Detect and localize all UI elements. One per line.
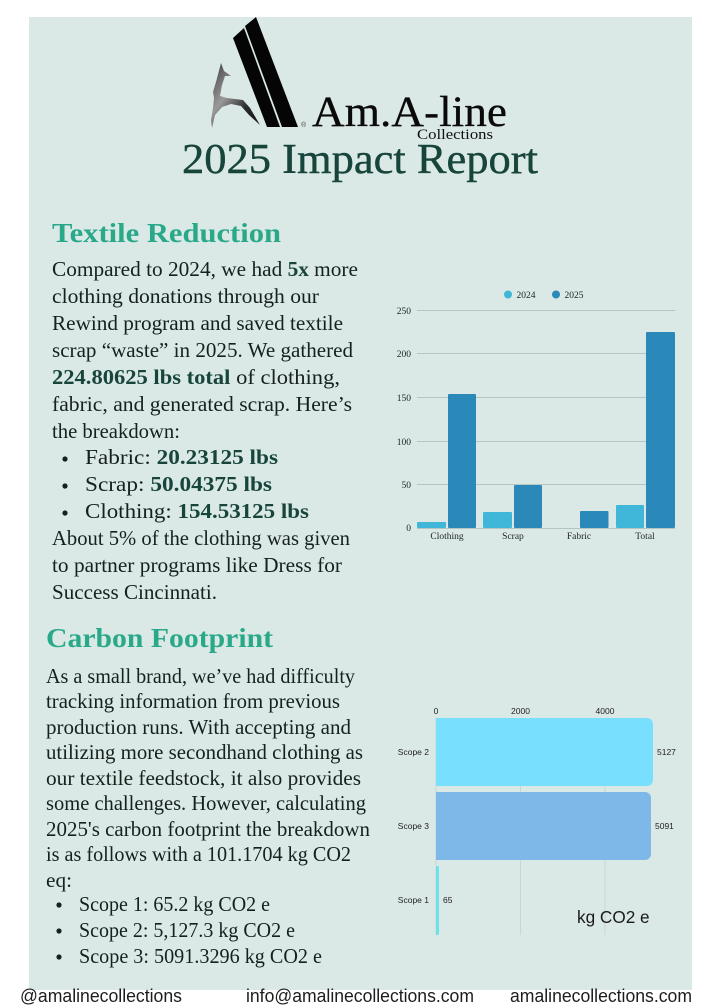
y axis labels: 250 (397, 307, 411, 317)
scope labels: Scope 3 (398, 821, 429, 831)
legend (504, 290, 584, 301)
list: textile breakdown: Fabric: 20.23125 lbs (85, 445, 278, 469)
legend: 2025 (564, 291, 584, 301)
x axis labels: Fabric (567, 532, 591, 542)
list: textile breakdown (62, 445, 309, 523)
text block: partner programs: About 5% of the clothing was given (52, 526, 350, 550)
value labels: 65 (443, 895, 453, 905)
value labels: 5091 (655, 821, 674, 831)
heading: textile reduction: Textile Reduction (52, 218, 281, 248)
bars: 2024 (417, 505, 644, 528)
top axis labels (434, 706, 615, 716)
x axis labels: Total (635, 532, 655, 542)
icon: logo stripes (233, 17, 298, 127)
legend: 2024 (516, 291, 536, 301)
text block: carbon intro (46, 664, 370, 892)
text block: carbon intro: 2025's carbon footprint the breakdown (46, 817, 370, 841)
logo wordmark: Am.A-line (312, 89, 507, 136)
x axis labels: Clothing (430, 532, 464, 542)
text block: textile intro: Rewind program and saved textile (52, 311, 343, 335)
text block: carbon intro: some challenges. However, calculating (46, 791, 366, 815)
top axis labels: 4000 (596, 706, 615, 716)
scope labels (398, 747, 429, 905)
bar chart: textile by year (397, 290, 675, 542)
list: textile breakdown: Scrap: 50.04375 lbs (85, 472, 272, 496)
value labels: 5127 (657, 747, 676, 757)
y axis labels: 0 (406, 524, 411, 534)
icon: registered mark: ® (301, 121, 307, 129)
list: scope breakdown: Scope 3: 5091.3296 kg CO2 e (79, 944, 322, 968)
y axis labels: 50 (402, 481, 411, 491)
title: 2025 Impact Report (182, 137, 538, 183)
top axis labels: 0 (434, 706, 439, 716)
text block: textile intro (52, 257, 358, 443)
text block: textile intro: the breakdown: (52, 419, 180, 443)
text block: carbon intro: As a small brand, we’ve had difficulty (46, 664, 355, 688)
bars: 2025 (448, 332, 675, 528)
text block: partner programs: Success Cincinnati. (52, 580, 217, 604)
heading: carbon footprint: Carbon Footprint (46, 623, 273, 653)
panel: carbon footprint (46, 623, 370, 968)
text block: carbon intro: eq: (46, 868, 72, 892)
text block: partner programs (52, 526, 350, 604)
scope labels: Scope 1 (398, 895, 429, 905)
scope labels: Scope 2 (398, 747, 429, 757)
text block: carbon intro: tracking information from previous (46, 689, 340, 713)
y axis labels: 100 (397, 438, 411, 448)
bar: scope 3 (436, 792, 651, 860)
footer: email: info@amalinecollections.com (246, 986, 474, 1006)
text block: textile intro: fabric, and generated scrap. Here’s (52, 392, 352, 416)
list: scope breakdown (56, 892, 322, 968)
footer (20, 986, 692, 1006)
text block: carbon intro: is as follows with a 101.1704 kg CO2 (46, 842, 351, 866)
x axis labels (430, 532, 655, 542)
icon: gazelle (211, 63, 260, 128)
footer: website: amalinecollections.com (510, 986, 692, 1006)
value labels (443, 747, 676, 905)
logo subtitle: Collections (417, 127, 493, 143)
y axis labels: 200 (397, 350, 411, 360)
x axis labels: Scrap (502, 532, 524, 542)
text block: textile intro: scrap “waste” in 2025. We gathered (52, 338, 353, 362)
text block: textile intro: clothing donations through our (52, 284, 319, 308)
text block: carbon intro: utilizing more secondhand clothing as (46, 740, 363, 764)
unit label: kg CO2 e (577, 907, 650, 927)
text block: textile intro: Compared to 2024, we had 5x more (52, 257, 358, 281)
logo: Am.A-line Collections (211, 17, 507, 143)
bar: scope 1 (436, 866, 439, 935)
bar: scope 2 (436, 718, 653, 786)
top axis labels: 2000 (511, 706, 530, 716)
list: scope breakdown: Scope 2: 5,127.3 kg CO2 e (79, 918, 295, 942)
text block: textile intro: 224.80625 lbs total of clothing, (52, 365, 340, 389)
y axis labels: 150 (397, 394, 411, 404)
list: textile breakdown: Clothing: 154.53125 lbs (85, 499, 309, 523)
panel: textile reduction (52, 218, 358, 604)
text block: partner programs: to partner programs like Dress for (52, 553, 342, 577)
list: scope breakdown: Scope 1: 65.2 kg CO2 e (79, 892, 270, 916)
y axis labels (397, 307, 411, 534)
text block: carbon intro: production runs. With accepting and (46, 715, 351, 739)
text block: carbon intro: our textile feedstock, it also provides (46, 766, 361, 790)
bar chart: emissions by scope (398, 706, 676, 935)
footer: social handle: @amalinecollections (20, 986, 182, 1006)
